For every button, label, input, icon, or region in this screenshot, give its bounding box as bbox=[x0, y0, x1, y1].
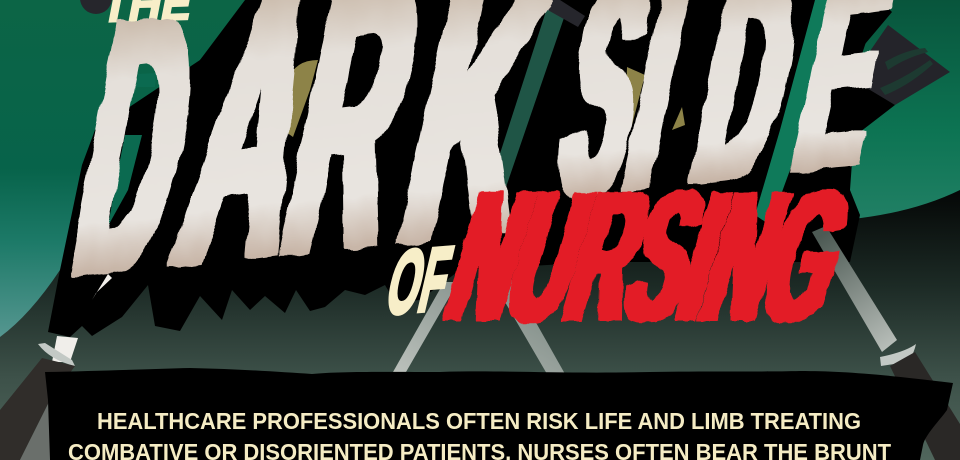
blade left of centre bbox=[393, 282, 458, 372]
black shadow behind the title bbox=[48, 0, 892, 337]
dark brush shape bbox=[838, 25, 950, 132]
dark disc at top bbox=[80, 0, 112, 14]
word: OF: OF bbox=[378, 229, 460, 334]
green stripe behind the letter E bbox=[755, 0, 832, 225]
right green shape bbox=[835, 0, 960, 219]
green stripe behind the title bbox=[485, 8, 566, 215]
khaki patches behind the letters bbox=[276, 60, 685, 137]
intro paragraph: HEALTHCARE PROFESSIONALS OFTEN RISK LIFE AND LIMB TREATING bbox=[97, 408, 861, 434]
blade right of centre bbox=[498, 280, 565, 374]
word: NURSING: NURSING bbox=[429, 154, 868, 360]
dark strap bbox=[530, 0, 585, 27]
green patches inside the D bbox=[108, 73, 156, 226]
black torn text banner bbox=[45, 368, 953, 460]
intro paragraph bbox=[68, 408, 891, 460]
right sword bbox=[812, 226, 960, 460]
title words: DARK SIDE bbox=[51, 0, 910, 353]
left sword bbox=[0, 274, 112, 460]
left green shape bbox=[0, 0, 250, 337]
